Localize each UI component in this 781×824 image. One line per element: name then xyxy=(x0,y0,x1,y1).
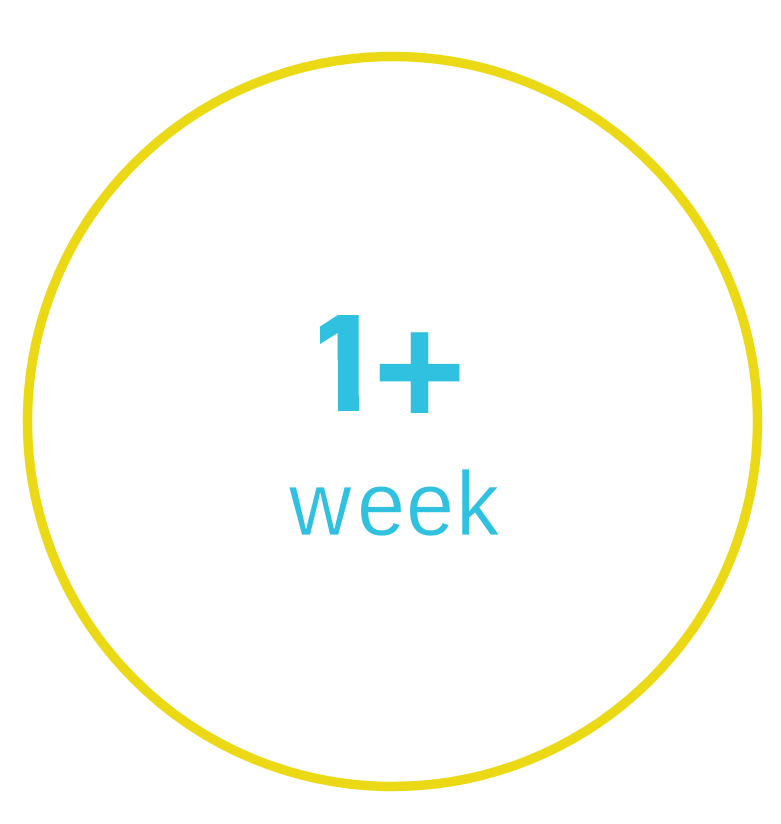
number: 1+: 1 xyxy=(306,285,384,441)
number: 1+: + xyxy=(373,282,466,460)
label: week: week xyxy=(288,453,500,554)
number: 1+ xyxy=(320,315,460,413)
